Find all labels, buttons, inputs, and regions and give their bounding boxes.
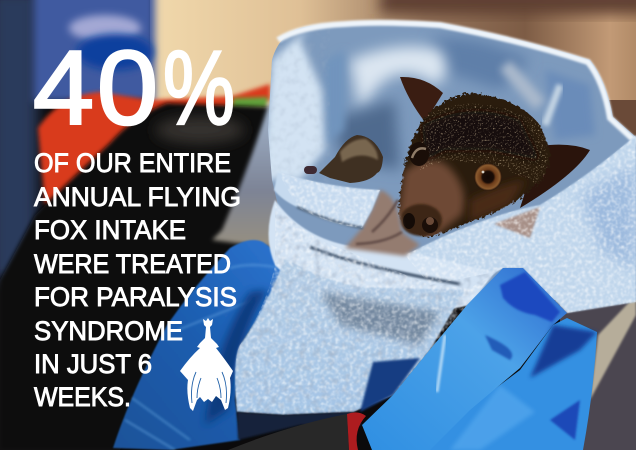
left towel flap — [262, 26, 325, 180]
towel back wall — [260, 20, 636, 300]
big stat 40% — [33, 30, 235, 147]
left blue glove — [113, 240, 285, 450]
dark sleeve cuff with red band — [228, 412, 366, 450]
cavity shading — [430, 38, 530, 90]
stat description text: WERE TREATED — [34, 249, 231, 279]
stat description text: WEEKS. — [34, 382, 131, 412]
stat description text: FOX INTAKE — [34, 215, 186, 245]
stat description text: ANNUAL FLYING — [34, 182, 241, 212]
upper fold lobe — [274, 172, 380, 228]
big stat 40%: 4 — [33, 30, 94, 147]
lower fold — [268, 200, 495, 320]
towel texture — [235, 135, 636, 415]
flying fox pup — [304, 77, 590, 240]
bat eyes — [409, 142, 502, 191]
bat thumb — [304, 135, 383, 183]
dark shadow under towel — [237, 412, 362, 440]
stat description text: OF OUR ENTIRE — [34, 148, 231, 178]
towel sack — [235, 258, 465, 415]
icon: hanging bat — [180, 318, 233, 411]
stat description text: IN JUST 6 — [34, 349, 152, 379]
big stat 40%: % — [163, 30, 235, 147]
bat ears — [400, 77, 590, 208]
bat wing skin — [345, 190, 420, 256]
stat description text: SYNDROME — [34, 316, 183, 346]
towel rim — [278, 23, 636, 142]
towel folds — [235, 135, 636, 415]
big stat 40%: 0 — [97, 30, 158, 147]
bat snout — [400, 204, 442, 236]
right blue glove — [360, 268, 597, 450]
bat head — [397, 93, 550, 240]
right fold — [405, 135, 636, 313]
stat description text — [34, 148, 241, 412]
stat description text: FOR PARALYSIS — [34, 282, 237, 312]
